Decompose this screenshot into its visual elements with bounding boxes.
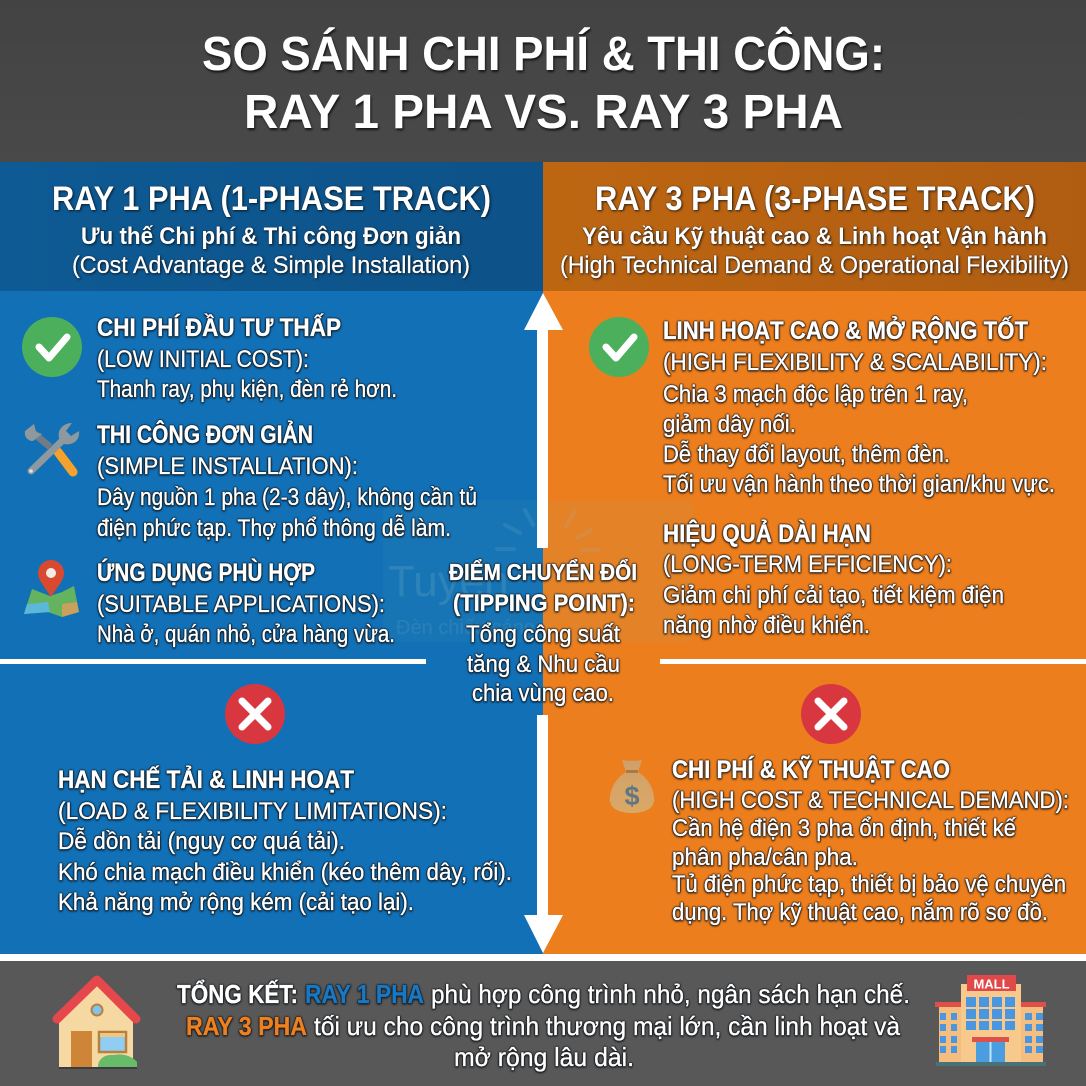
title banner — [0, 0, 1086, 162]
benefit: simple installation — [97, 419, 477, 542]
tipping point callout — [449, 558, 637, 707]
summary text: mở rộng lâu dài. — [454, 1042, 634, 1072]
benefit: flexibility and scalability: (HIGH FLEXIBILITY & SCALABILITY): — [663, 349, 1047, 376]
benefit: suitable applications — [97, 557, 395, 648]
header: ray 3 pha — [543, 162, 1086, 291]
watermark — [383, 500, 693, 642]
divider right — [660, 659, 1086, 664]
benefit: long-term efficiency: năng nhờ điều khiển. — [663, 612, 870, 639]
title banner: SO SÁNH CHI PHÍ & THI CÔNG: — [202, 26, 885, 81]
benefit: simple installation: THI CÔNG ĐƠN GIẢN — [97, 419, 313, 449]
watermark: Tuyến — [388, 557, 509, 606]
summary text: TỔNG KẾT: — [177, 979, 298, 1009]
drawback: load and flexibility limits: Dễ dồn tải (nguy cơ quá tải). — [58, 828, 345, 855]
icon: cross right — [801, 684, 861, 744]
benefit: flexibility and scalability: Tối ưu vận hành theo thời gian/khu vực. — [663, 471, 1055, 498]
drawback: load and flexibility limits: HẠN CHẾ TẢI & LINH HOẠT — [58, 764, 354, 794]
drawback: high cost and technical demand: Cần hệ điện 3 pha ổn định, thiết kế — [672, 815, 1016, 842]
benefit: flexibility and scalability: Dễ thay đổi layout, thêm đèn. — [663, 441, 950, 468]
icon: tools — [25, 423, 79, 473]
benefit: low initial cost: Thanh ray, phụ kiện, đèn rẻ hơn. — [97, 376, 397, 403]
benefit: low initial cost: (LOW INITIAL COST): — [97, 346, 309, 373]
icon: mall: MALL — [973, 976, 1010, 992]
icon: check left — [22, 317, 82, 377]
benefit: low initial cost — [97, 313, 397, 403]
icon: mall — [935, 975, 1046, 1066]
summary text: RAY 1 PHA — [305, 979, 424, 1009]
header: ray 1 pha: (Cost Advantage & Simple Installation) — [72, 252, 470, 279]
drawback: high cost and technical demand: CHI PHÍ & KỸ THUẬT CAO — [672, 754, 950, 784]
benefit: low initial cost: CHI PHÍ ĐẦU TƯ THẤP — [97, 313, 341, 342]
icon: cross left — [225, 684, 285, 744]
tipping point callout: chia vùng cao. — [472, 680, 614, 707]
benefit: long-term efficiency: HIỆU QUẢ DÀI HẠN — [663, 518, 871, 548]
header: ray 3 pha: (High Technical Demand & Operational Flexibility) — [560, 252, 1069, 279]
icon: money bag: $ — [624, 781, 640, 811]
watermark: Đèn chiếu sáng — [396, 617, 535, 639]
drawback: load and flexibility limits — [58, 764, 512, 916]
benefit: simple installation: Dây nguồn 1 pha (2-3 dây), không cần tủ — [97, 484, 477, 511]
summary text: tối ưu cho công trình thương mại lớn, cần linh hoạt và — [314, 1011, 901, 1041]
drawback: load and flexibility limits: Khó chia mạch điều khiển (kéo thêm dây, rối). — [58, 859, 512, 886]
benefit: flexibility and scalability: LINH HOẠT CAO & MỞ RỘNG TỐT — [663, 315, 1028, 345]
benefit: suitable applications: Nhà ở, quán nhỏ, cửa hàng vừa. — [97, 621, 395, 648]
summary text: RAY 3 PHA — [186, 1011, 307, 1041]
divider left — [0, 659, 426, 664]
benefit: flexibility and scalability — [663, 315, 1055, 498]
benefit: long-term efficiency: (LONG-TERM EFFICIENCY): — [663, 551, 952, 578]
arrow down — [524, 715, 563, 953]
header: ray 1 pha: RAY 1 PHA (1-PHASE TRACK) — [52, 180, 491, 218]
drawback: high cost and technical demand: phân pha/cân pha. — [672, 844, 858, 871]
drawback: load and flexibility limits: Khả năng mở rộng kém (cải tạo lại). — [58, 889, 414, 916]
icon: house — [57, 980, 137, 1069]
header: ray 1 pha: Ưu thế Chi phí & Thi công Đơn giản — [81, 223, 461, 250]
tipping point callout: tăng & Nhu cầu — [467, 651, 620, 678]
header: ray 3 pha: Yêu cầu Kỹ thuật cao & Linh hoạt Vận hành — [582, 223, 1047, 250]
benefit: simple installation: (SIMPLE INSTALLATION): — [97, 453, 358, 480]
tipping point callout: (TIPPING POINT): — [453, 590, 635, 617]
icon: map pin — [24, 560, 79, 617]
header: ray 1 pha — [0, 162, 543, 291]
tipping point callout: ĐIỂM CHUYỂN ĐỔI — [449, 558, 637, 585]
header: ray 3 pha: RAY 3 PHA (3-PHASE TRACK) — [595, 180, 1035, 218]
arrow up — [524, 293, 563, 548]
drawback: high cost and technical demand: dụng. Thợ kỹ thuật cao, nắm rõ sơ đồ. — [672, 899, 1048, 926]
panel: ray 1 pha — [0, 162, 543, 954]
benefit: simple installation: điện phức tạp. Thợ phổ thông dễ làm. — [97, 515, 451, 542]
benefit: flexibility and scalability: Chia 3 mạch độc lập trên 1 ray, — [663, 381, 968, 408]
summary text: phù hợp công trình nhỏ, ngân sách hạn chế. — [431, 979, 910, 1009]
title banner: RAY 1 PHA VS. RAY 3 PHA — [244, 86, 843, 139]
footer panel — [0, 954, 1086, 1086]
icon: check right — [589, 317, 649, 377]
benefit: flexibility and scalability: giảm dây nối. — [663, 411, 796, 438]
tipping point callout: Tổng công suất — [466, 621, 620, 648]
benefit: suitable applications: (SUITABLE APPLICATIONS): — [97, 591, 385, 618]
panel: ray 3 pha — [543, 162, 1086, 954]
benefit: long-term efficiency — [663, 518, 1004, 639]
summary text — [177, 979, 910, 1072]
drawback: high cost and technical demand — [672, 754, 1069, 926]
benefit: suitable applications: ỨNG DỤNG PHÙ HỢP — [97, 557, 315, 587]
icon: money bag — [610, 760, 654, 813]
drawback: load and flexibility limits: (LOAD & FLEXIBILITY LIMITATIONS): — [58, 798, 447, 825]
benefit: long-term efficiency: Giảm chi phí cải tạo, tiết kiệm điện — [663, 582, 1004, 609]
